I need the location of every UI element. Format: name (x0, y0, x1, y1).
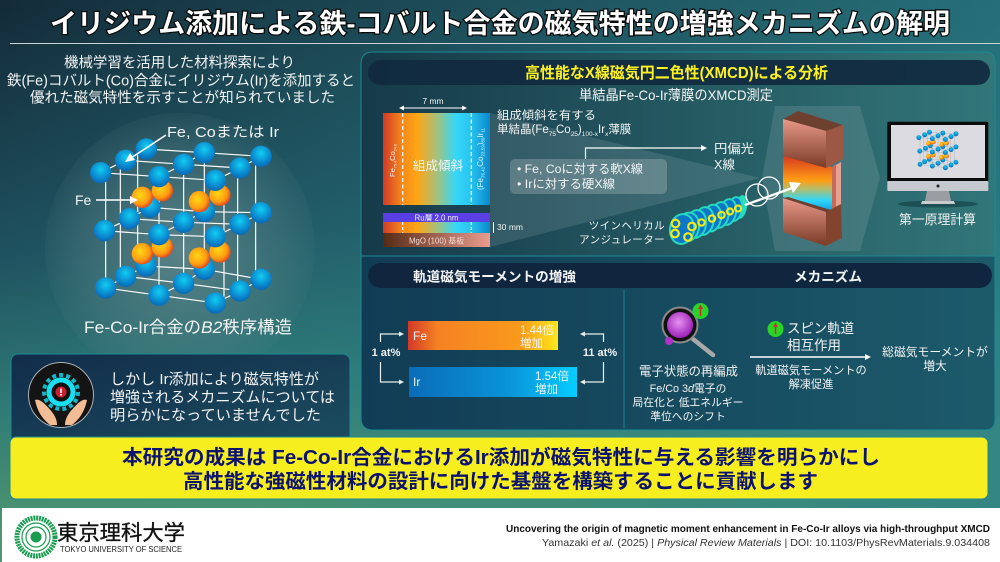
text: mechanism unknown: しかし Ir添加により磁気特性が (110, 371, 319, 388)
mini crystal (916, 130, 958, 170)
label: first-principles calculation: 第一原理計算 (899, 212, 976, 227)
film description (497, 108, 631, 138)
diagram: layer stack: MgO (100) 基板 (409, 236, 464, 246)
bar: Fe: 増加 (520, 337, 543, 350)
text: electronic state reorganization (633, 364, 743, 423)
conclusion banner (10, 437, 988, 499)
bar: Ir: 1.54倍 (535, 370, 569, 383)
conclusion banner: 本研究の成果は Fe-Co-Ir合金におけるIr添加が磁気特性に与える影響を明らかにし (122, 445, 880, 469)
text: mechanism unknown (110, 371, 335, 424)
text: orbital moment unquenching (755, 363, 867, 391)
citation: Yamazaki et al. (2025) | Physical Review Materials | DOI: 10.1103/PhysRevMaterials.9.034408 (542, 537, 990, 549)
text: mechanism unknown: 増強されるメカニズムについては (110, 389, 335, 406)
intro text: 鉄(Fe)コバルト(Co)合金にイリジウム(Ir)を添加すると (7, 72, 355, 90)
icon: magnifier with electron (662, 303, 713, 355)
icon: spin marker (768, 321, 784, 337)
left composition label: 24.6 (394, 144, 398, 151)
label: 1 at%: 1 at% (372, 347, 401, 359)
icon: sample between magnet blocks (783, 111, 843, 246)
arrow: x-ray beam with polarization (745, 177, 801, 206)
diagram: film composition gradient (383, 96, 490, 205)
right composition label: 11 (480, 127, 486, 133)
right composition label: 89 (480, 137, 486, 143)
lower magnet block (783, 197, 842, 246)
arrow: to Fe, Co or Ir atom (125, 135, 166, 162)
label: twin helical undulator (579, 220, 665, 246)
intro text: 機械学習を活用した材料探索により (64, 54, 295, 72)
arrow: circularly polarized x-ray (586, 145, 707, 159)
intro text (7, 54, 355, 106)
film description: Co (556, 124, 571, 136)
right composition label: 23.59 (480, 145, 486, 156)
logo: university emblem (17, 518, 55, 556)
heading band (368, 60, 990, 85)
citation (506, 523, 990, 549)
label: Fe, Co or Ir: Fe, Coまたは Ir (167, 124, 279, 141)
text: total moment increased: 増大 (923, 359, 947, 373)
conclusion banner: 高性能な強磁性材料の設計に向けた基盤を構築することに貢献します (183, 470, 818, 493)
text: orbital moment unquenching: 軌道磁気モーメントの (755, 363, 867, 377)
bar: Ir: Ir (413, 375, 420, 389)
text: total moment increased (882, 345, 988, 373)
callout: soft and hard x-rays: • Fe, Coに対する軟X線 (517, 161, 643, 176)
left composition label: Fe (388, 168, 397, 177)
panel: unresolved question (11, 354, 350, 449)
film description: ) (578, 124, 582, 136)
arrows: concentration to bars (380, 332, 604, 384)
icon: computer monitor (887, 122, 988, 208)
left composition label: 75.4 (394, 161, 398, 168)
label: Fe: Fe (75, 192, 92, 208)
heading band: 高性能なX線磁気円二色性(XMCD)による分析 (525, 63, 828, 82)
label: circularly polarized x-ray (714, 142, 754, 172)
logo: university name: 東京理科大学 (57, 521, 185, 545)
label: 11 at%: 11 at% (583, 347, 617, 359)
text: spin-orbit interaction: 相互作用 (787, 338, 841, 353)
left composition label: Co (388, 151, 397, 161)
right composition label: 76.41 (480, 166, 486, 178)
citation: Uncovering the origin of magnetic moment enhancement in Fe-Co-Ir alloys via high-throughput XMCD (506, 523, 990, 535)
film description: x (605, 131, 609, 138)
intro text: 優れた磁気特性を示すことが知られていました (30, 90, 335, 106)
subheading: 単結晶Fe-Co-Ir薄膜のXMCD測定 (579, 87, 773, 103)
caption: Fe-Co-Ir合金のB2秩序構造 (84, 318, 292, 337)
text: spin-orbit interaction: スピン軌道 (787, 321, 854, 336)
label: twin helical undulator: アンジュレーター (579, 234, 665, 246)
bar: Ir (409, 367, 577, 397)
upper magnet block (783, 111, 843, 168)
bar: Fe: 1.44倍 (520, 324, 554, 337)
label: twin helical undulator: ツインヘリカル (589, 220, 665, 232)
label: circularly polarized x-ray: 円偏光 (714, 142, 754, 156)
panel: XMCD analysis (361, 52, 995, 256)
panel: orbital moment and mechanism (361, 256, 995, 430)
panel: B2 crystal structure (45, 113, 315, 383)
callout: soft and hard x-rays (510, 159, 667, 194)
text: electronic state reorganization: 電子状態の再編成 (639, 364, 738, 378)
text: orbital moment unquenching: 解凍促進 (789, 377, 833, 391)
right composition label: Co (476, 156, 485, 167)
film description: Ir (598, 124, 605, 136)
x-ray cone (490, 113, 760, 247)
film description: 25 (571, 131, 578, 138)
icon: undulator (668, 195, 748, 246)
label: circularly polarized x-ray: X線 (714, 157, 735, 172)
footer (2, 508, 1000, 562)
bar: Ir: 増加 (535, 383, 558, 396)
film description: 単結晶(Fe (497, 124, 549, 136)
width dimension: 7 mm (422, 96, 444, 106)
diagram: layer stack (383, 213, 523, 247)
diagram: layer stack: Ru層 2.0 nm (415, 214, 458, 222)
heading band: 軌道磁気モーメントの増強 (413, 268, 576, 284)
heading band (368, 263, 992, 288)
logo: university name: TOKYO UNIVERSITY OF SCIENCE (60, 544, 182, 554)
sample backdrop (762, 106, 880, 251)
diagram: layer stack: 30 mm (497, 222, 523, 232)
right composition label: (Fe (476, 178, 485, 190)
bar: Fe: Fe (413, 329, 427, 343)
text: spin-orbit interaction (787, 321, 854, 353)
icon: gear held in hands (28, 362, 94, 428)
film description: 100-x (582, 131, 599, 138)
text: electronic state reorganization: 局在化と 低エネルギー (633, 396, 743, 409)
title: イリジウム添加による鉄-コバルト合金の磁気特性の増強メカニズムの解明 (50, 8, 950, 39)
crystal lattice (90, 138, 272, 314)
text: electronic state reorganization: Fe/Co 3d電子の (650, 382, 726, 395)
callout: soft and hard x-rays: • Irに対する硬X線 (517, 176, 615, 191)
heading band: メカニズム (794, 268, 862, 284)
right composition label: Ir (476, 132, 485, 138)
gradient label: 組成傾斜 (413, 158, 463, 173)
arrow: to Fe atom (96, 196, 138, 204)
text: mechanism unknown: 明らかになっていませんでした (110, 407, 321, 424)
film description: 75 (549, 131, 556, 138)
text: total moment increased: 総磁気モーメントが (882, 345, 988, 359)
film description: 組成傾斜を有する (497, 108, 596, 122)
bar: Fe (408, 321, 558, 350)
arrow: to total moment (750, 354, 871, 360)
right composition label: ) (476, 142, 485, 145)
text: electronic state reorganization: 準位へのシフト (650, 409, 726, 423)
film description: 薄膜 (608, 122, 631, 136)
